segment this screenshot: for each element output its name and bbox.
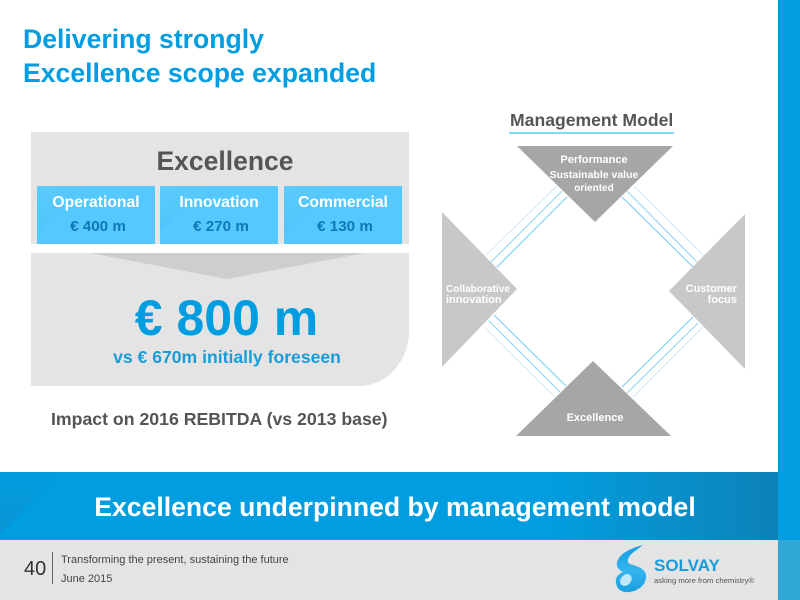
banner: conclusion	[0, 472, 778, 540]
logo mark	[616, 545, 646, 592]
box: Commercial: € 130 m	[317, 218, 373, 235]
banner text: Excellence underpinned by management model	[94, 492, 696, 522]
triangle: Customer focus	[669, 214, 745, 369]
footer divider	[52, 552, 53, 584]
triangle: Customer focus: focus	[708, 294, 737, 306]
triangle: Performance	[517, 146, 673, 222]
heading: Management Model: Management Model	[510, 110, 673, 130]
triangle: Excellence	[516, 361, 671, 436]
box: Operational	[37, 186, 155, 244]
banner highlight	[0, 507, 24, 532]
page number: 40	[24, 558, 46, 580]
panel: Excellence breakdown	[31, 132, 409, 244]
footer	[0, 540, 778, 600]
box: Commercial	[284, 186, 402, 244]
footer date: June 2015	[61, 573, 112, 585]
box: Innovation: Innovation	[179, 194, 259, 211]
right sidebar	[778, 0, 800, 600]
title: Delivering strongly	[23, 24, 264, 54]
heading: Excellence: Excellence	[156, 146, 294, 176]
triangle: Performance: Sustainable value	[550, 169, 639, 181]
caption: impact: Impact on 2016 REBITDA (vs 2013 base)	[51, 409, 388, 429]
box: Innovation	[160, 186, 278, 244]
comparison text: vs € 670m initially foreseen	[113, 347, 341, 367]
total value: € 800 m	[135, 290, 318, 346]
box: Innovation: € 270 m	[193, 218, 249, 235]
box: Operational: Operational	[52, 194, 140, 211]
box: Operational: € 400 m	[70, 218, 126, 235]
box: Commercial: Commercial	[298, 194, 388, 211]
connector lines	[484, 186, 703, 397]
chart: management model diagram	[442, 146, 745, 436]
title	[23, 24, 376, 88]
triangle: Performance: oriented	[574, 183, 614, 194]
logo name: SOLVAY	[654, 556, 720, 575]
footer text: Transforming the present, sustaining the future	[61, 554, 289, 566]
arrow: chevron down	[91, 253, 364, 279]
title: Excellence scope expanded	[23, 58, 376, 88]
triangle: Collaborative innovation	[442, 212, 517, 367]
triangle: Collaborative innovation: Collaborative	[446, 284, 510, 295]
panel: total savings	[31, 253, 409, 386]
triangle: Performance: Performance	[560, 154, 628, 166]
triangle: Excellence: Excellence	[567, 412, 623, 424]
triangle: Collaborative innovation: innovation	[446, 294, 502, 306]
logo: Solvay	[616, 545, 754, 592]
triangle: Customer focus: Customer	[686, 283, 738, 295]
logo tagline: asking more from chemistry®	[654, 576, 754, 585]
